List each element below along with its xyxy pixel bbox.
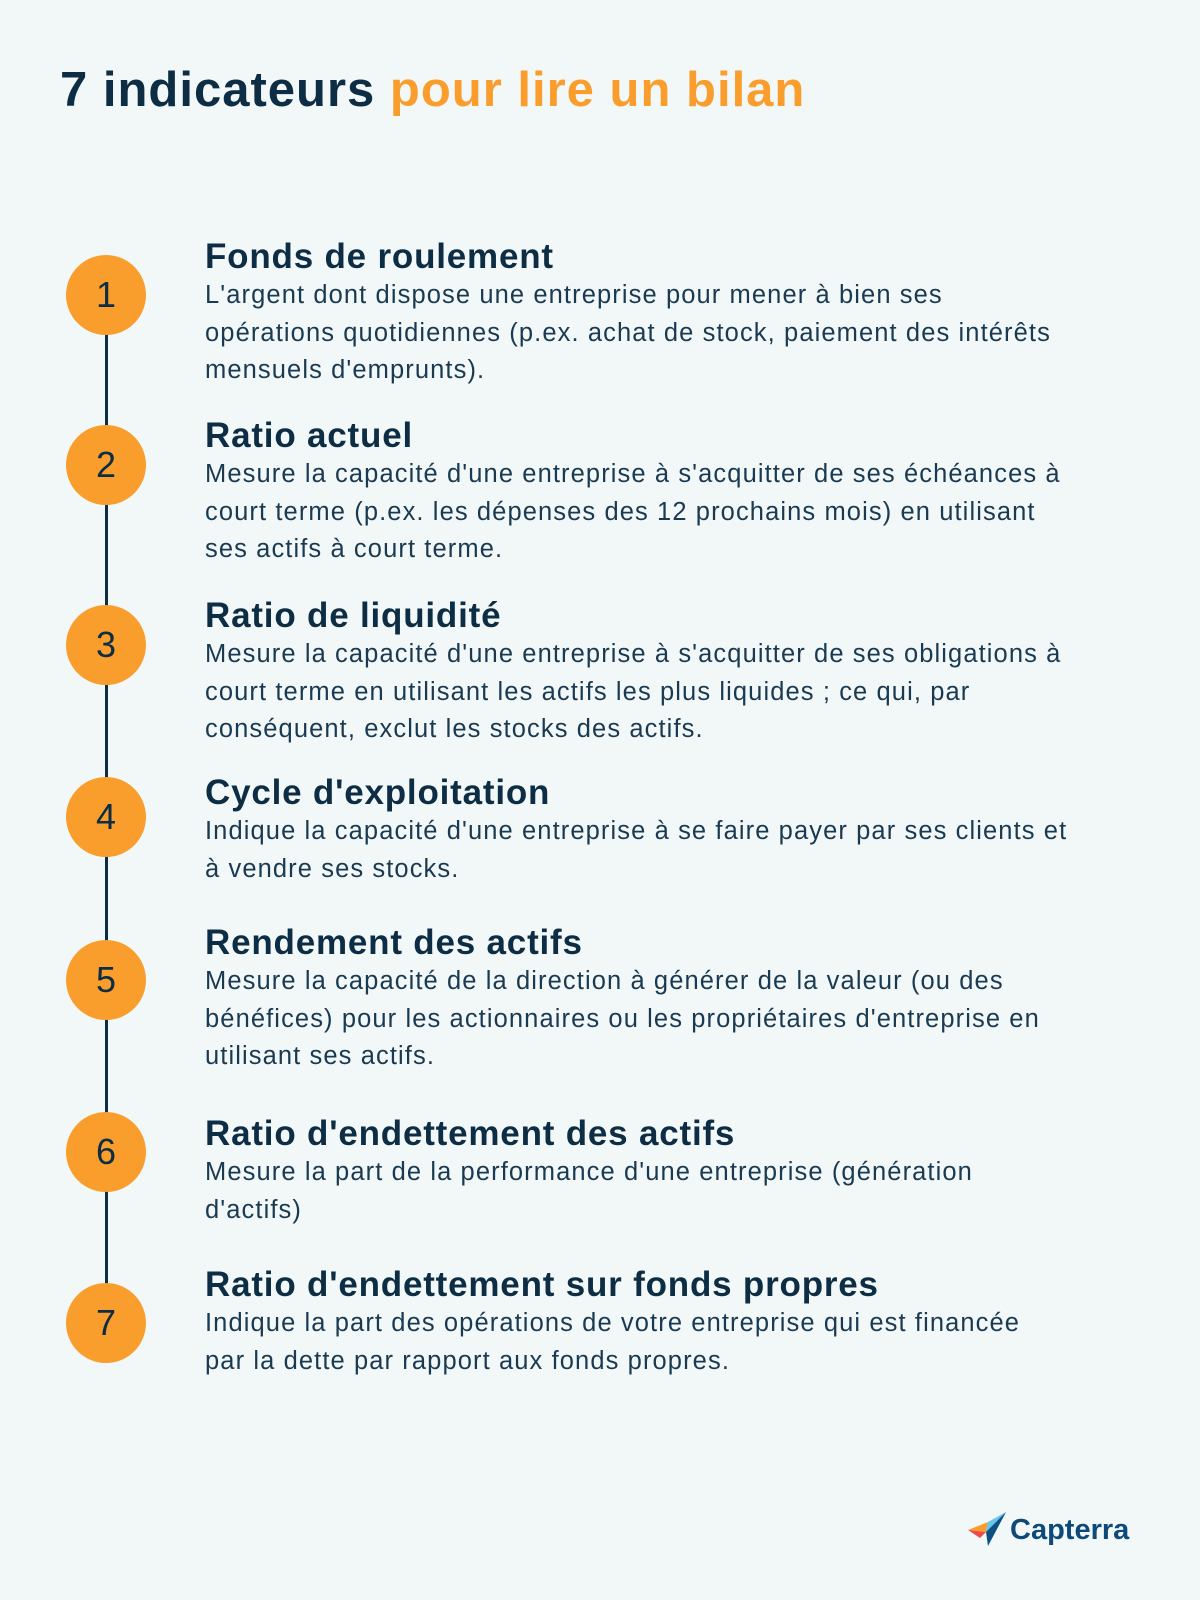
item 5: bénéfices) pour les actionnaires ou les propriétaires d'entreprise en (205, 1004, 1040, 1032)
circle 2: 2 (96, 444, 116, 485)
circle 3 (66, 605, 146, 685)
timeline line (105, 295, 108, 1323)
item 1: mensuels d'emprunts). (205, 356, 485, 384)
circle 4 (66, 777, 146, 857)
circle 3: 3 (96, 624, 116, 665)
item 4: Indique la capacité d'une entreprise à se faire payer par ses clients et (205, 817, 1067, 845)
item 6: d'actifs) (205, 1196, 302, 1224)
circle 1 (66, 255, 146, 335)
item 1: opérations quotidiennes (p.ex. achat de stock, paiement des intérêts (205, 318, 1051, 346)
circle 2 (66, 425, 146, 505)
item 3: conséquent, exclut les stocks des actifs. (205, 715, 704, 743)
item 7 (205, 1265, 1020, 1374)
item 5: Rendement des actifs (205, 923, 583, 962)
item 1: Fonds de roulement (205, 237, 554, 276)
item 5: utilisant ses actifs. (205, 1042, 435, 1070)
item 6 (205, 1114, 973, 1224)
item 3: court terme en utilisant les actifs les plus liquides ; ce qui, par (205, 678, 970, 706)
item 4 (205, 773, 1067, 882)
circle 1: 1 (96, 274, 116, 315)
circle 6 (66, 1112, 146, 1192)
item 7: Ratio d'endettement sur fonds propres (205, 1265, 879, 1304)
item 4: Cycle d'exploitation (205, 773, 550, 812)
item 4: à vendre ses stocks. (205, 854, 459, 882)
circle 6: 6 (96, 1131, 116, 1172)
circle 5: 5 (96, 959, 116, 1000)
item 7: par la dette par rapport aux fonds propres. (205, 1346, 730, 1374)
title: 7 indicateurs pour lire un bilan (60, 63, 805, 117)
item 1 (205, 237, 1051, 384)
item 6: Mesure la part de la performance d'une entreprise (génération (205, 1158, 973, 1186)
circle 4: 4 (96, 796, 116, 837)
item 5: Mesure la capacité de la direction à générer de la valeur (ou des (205, 967, 1004, 995)
item 3 (205, 596, 1061, 743)
item 5 (205, 923, 1040, 1070)
item 3: Mesure la capacité d'une entreprise à s'acquitter de ses obligations à (205, 640, 1061, 668)
circle 7: 7 (96, 1302, 116, 1343)
item 3: Ratio de liquidité (205, 596, 501, 635)
item 2 (205, 416, 1061, 563)
item 7: Indique la part des opérations de votre entreprise qui est financée (205, 1309, 1020, 1337)
circle 7 (66, 1283, 146, 1363)
item 2: ses actifs à court terme. (205, 535, 503, 563)
item 1: L'argent dont dispose une entreprise pour mener à bien ses (205, 281, 943, 309)
circle 5 (66, 940, 146, 1020)
logo: Capterra (968, 1512, 1130, 1546)
logo: Capterra: Capterra (1010, 1514, 1130, 1546)
item 6: Ratio d'endettement des actifs (205, 1114, 735, 1153)
item 2: Mesure la capacité d'une entreprise à s'acquitter de ses échéances à (205, 460, 1061, 488)
item 2: Ratio actuel (205, 416, 413, 455)
item 2: court terme (p.ex. les dépenses des 12 prochains mois) en utilisant (205, 498, 1036, 526)
